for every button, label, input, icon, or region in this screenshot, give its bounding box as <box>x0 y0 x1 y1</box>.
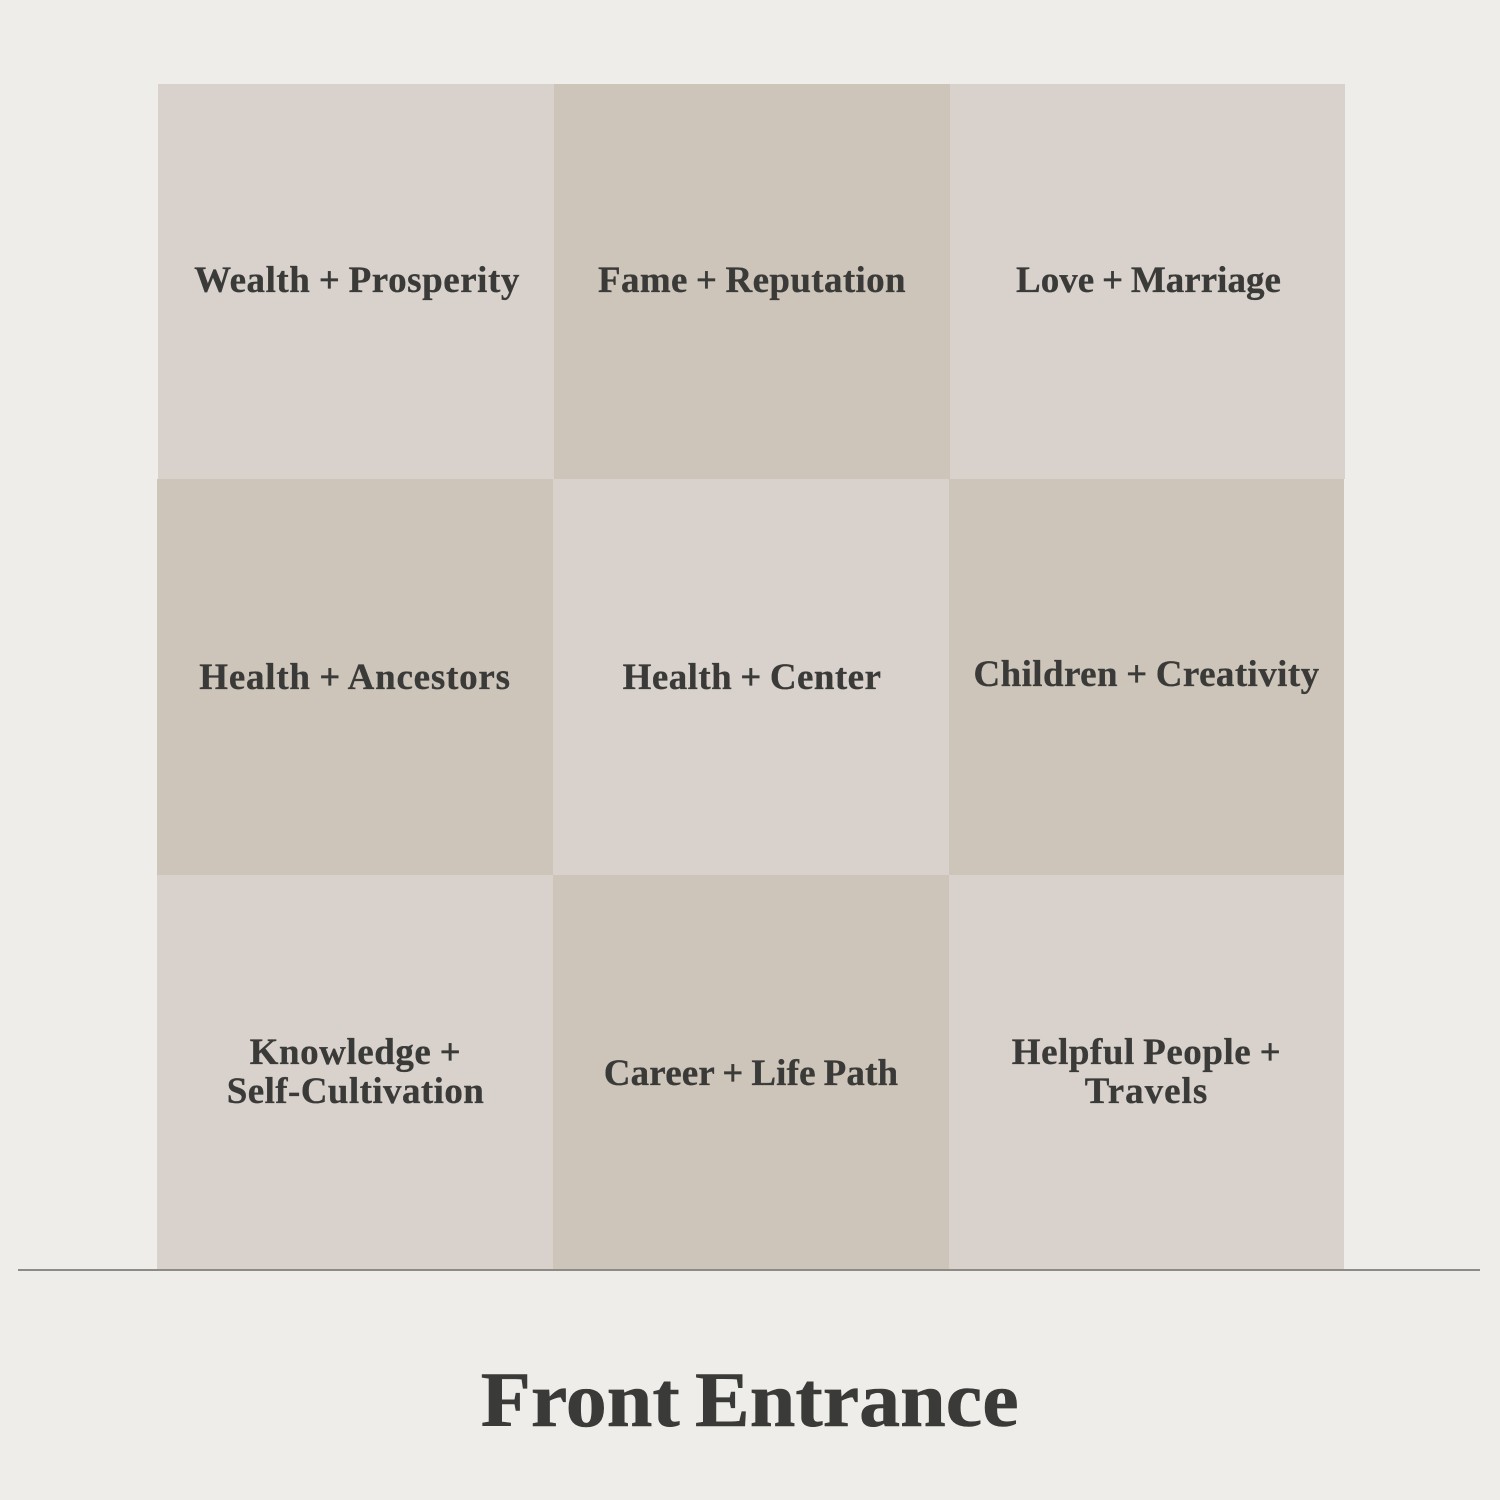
panel: Knowledge + Self-Cultivation <box>157 875 553 1270</box>
panel: Wealth + Prosperity <box>158 84 554 479</box>
panel: Helpful People + Travels: Travels <box>1085 1070 1208 1112</box>
baseline rule <box>18 1269 1480 1271</box>
title: Front Entrance: Front Entrance <box>481 1356 1019 1443</box>
panel: Health + Center <box>553 479 949 875</box>
panel: Career + Life Path <box>553 875 949 1270</box>
panel: Health + Ancestors <box>157 479 553 875</box>
panel: Career + Life Path: Career + Life Path <box>604 1053 898 1094</box>
panel: Fame + Reputation <box>554 84 950 479</box>
panel: Love + Marriage: Love + Marriage <box>1016 260 1281 301</box>
panel: Children + Creativity: Children + Creativity <box>974 654 1319 694</box>
panel: Fame + Reputation: Fame + Reputation <box>598 260 906 301</box>
panel: Helpful People + Travels <box>949 875 1344 1270</box>
panel: Knowledge + Self-Cultivation: Knowledge + <box>250 1032 461 1072</box>
panel: Health + Ancestors: Health + Ancestors <box>199 656 511 698</box>
panel: Children + Creativity <box>949 479 1344 875</box>
panel: Knowledge + Self-Cultivation: Self-Cultivation <box>227 1070 484 1112</box>
panel: Health + Center: Health + Center <box>623 656 881 698</box>
panel: Helpful People + Travels: Helpful People + <box>1012 1032 1281 1072</box>
panel: Wealth + Prosperity: Wealth + Prosperity <box>194 260 520 301</box>
panel: Love + Marriage <box>950 84 1345 479</box>
